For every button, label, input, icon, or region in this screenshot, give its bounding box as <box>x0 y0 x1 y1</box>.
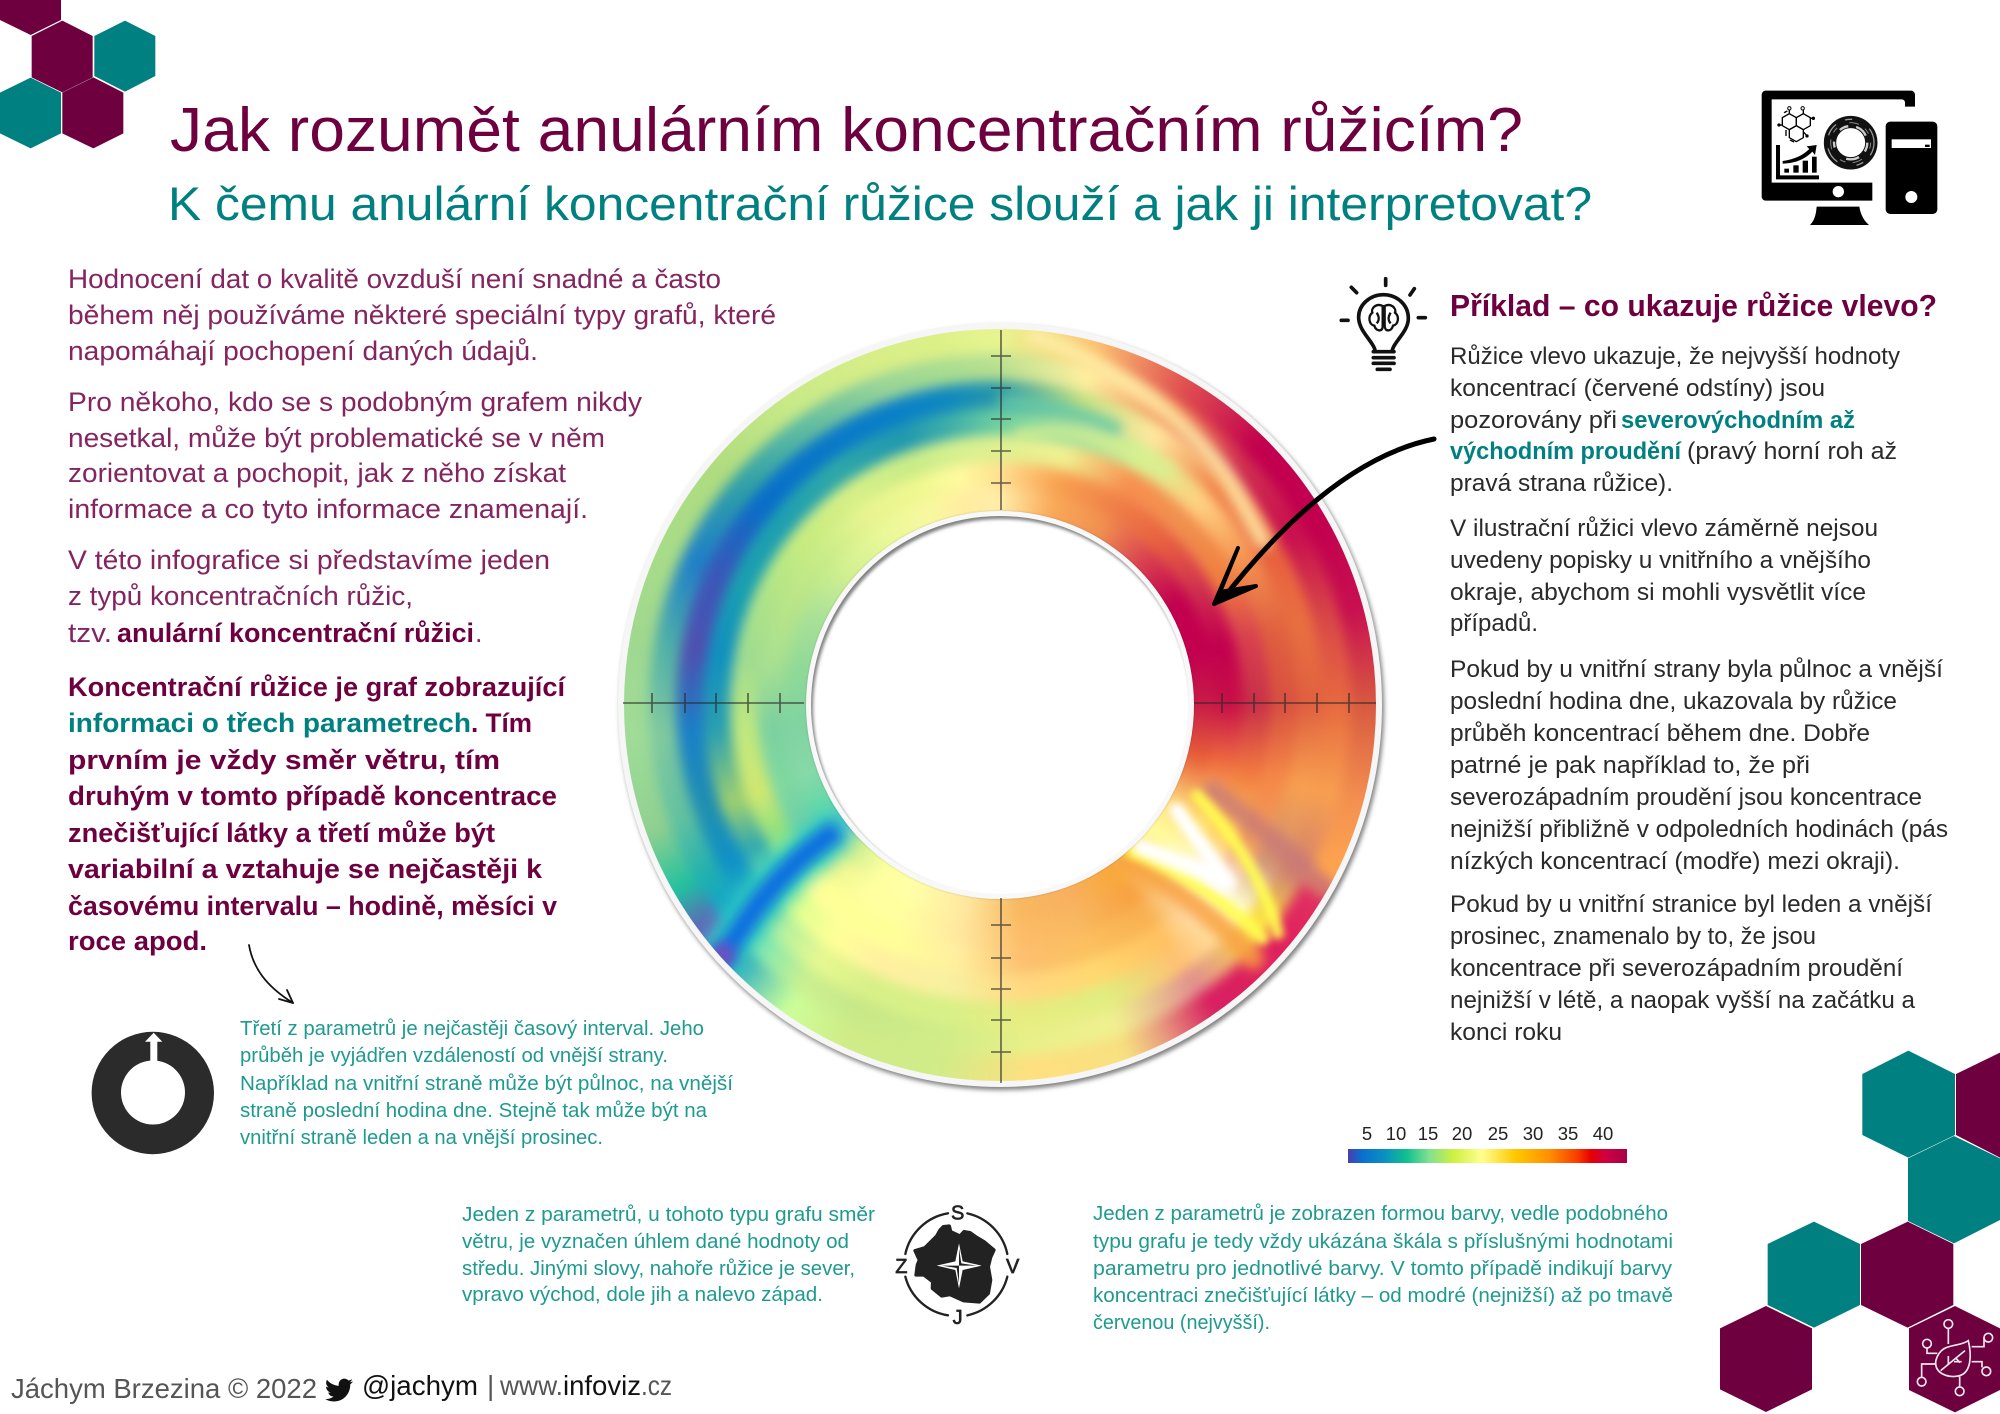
intro text: V této infografice si představíme jeden <box>68 545 550 575</box>
definition text: variabilní a vztahuje se nejčastěji k <box>68 854 543 884</box>
caption: colour parameter: červenou (nejvyšší). <box>1093 1312 1270 1334</box>
hexagons top left <box>0 0 155 148</box>
caption: third parameter: vnitřní straně leden a na vnější prosinec. <box>240 1127 603 1149</box>
example text: severovýchodním až <box>1621 407 1855 434</box>
legend: colour scale: 5 <box>1362 1123 1372 1144</box>
legend: colour scale: 40 <box>1593 1123 1613 1144</box>
intro text: zorientovat a pochopit, jak z něho získat <box>68 458 567 488</box>
example text: Růžice vlevo ukazuje, že nejvyšší hodnoty <box>1450 343 1901 370</box>
caption: third parameter: průběh je vyjádřen vzdáleností od vnější strany. <box>240 1045 668 1067</box>
footer: author and links: .cz <box>641 1370 672 1401</box>
legend: colour scale: 10 <box>1386 1123 1406 1144</box>
example text: pozorovány při <box>1450 407 1617 434</box>
footer: author and links <box>11 1370 672 1404</box>
example text: průběh koncentrací během dne. Dobře <box>1450 720 1870 747</box>
definition text: Koncentrační růžice je graf zobrazující <box>68 672 567 702</box>
icon: leaf circuit <box>1917 1320 1993 1396</box>
footer: author and links: infoviz <box>563 1370 641 1401</box>
footer: author and links: | <box>487 1370 494 1401</box>
example text: Pokud by u vnitřní strany byla půlnoc a vnější <box>1450 656 1943 683</box>
intro text: Hodnocení dat o kvalitě ovzduší není snadné a často <box>68 264 721 294</box>
legend: colour scale: 25 <box>1488 1123 1508 1144</box>
caption: colour parameter: Jeden z parametrů je zobrazen formou barvy, vedle podobného <box>1093 1203 1668 1225</box>
intro text: během něj používáme některé speciální typy grafů, které <box>68 300 776 330</box>
icon: compass with Czech map: S <box>951 1202 964 1224</box>
chart: annular concentration rose <box>616 322 1388 1094</box>
intro text: informace a co tyto informace znamenají. <box>68 494 588 524</box>
legend: colour scale <box>1348 1123 1627 1163</box>
example text: koncentrace při severozápadním proudění <box>1450 955 1903 982</box>
title: Jak rozumět anulárním koncentračním růžicím? <box>170 96 1523 165</box>
arrow: to time interval note <box>249 945 293 1003</box>
heading: example: Příklad – co ukazuje růžice vlevo? <box>1450 288 1937 323</box>
legend: colour scale: 35 <box>1558 1123 1578 1144</box>
example text: severozápadním proudění jsou koncentrace <box>1450 784 1922 811</box>
example text: nejnižší přibližně v odpoledních hodinách (pás <box>1450 816 1948 843</box>
definition text: roce apod. <box>68 926 207 956</box>
caption: third parameter: Třetí z parametrů je nejčastěji časový interval. Jeho <box>240 1018 704 1040</box>
example text: pravá strana růžice). <box>1450 470 1673 497</box>
example text: konci roku <box>1450 1019 1562 1046</box>
legend: colour scale: 15 <box>1418 1123 1438 1144</box>
caption: third parameter: straně poslední hodina dne. Stejně tak může být na <box>240 1100 708 1122</box>
intro text: nesetkal, může být problematické se v něm <box>68 423 605 453</box>
caption: colour parameter: koncentraci znečišťující látky – od modré (nejnižší) až po tmavě <box>1093 1285 1673 1307</box>
caption: colour parameter: typu grafu je tedy vždy ukázána škála s příslušnými hodnotami <box>1093 1231 1673 1253</box>
example text: (pravý horní roh až <box>1687 438 1897 465</box>
intro text: . <box>475 618 483 648</box>
caption: wind direction parameter: středu. Jinými slovy, nahoře růžice je sever, <box>462 1258 855 1280</box>
example text: východním proudění <box>1450 438 1682 465</box>
intro text <box>68 264 776 648</box>
caption: wind direction parameter: větru, je vyznačen úhlem dané hodnoty od <box>462 1231 849 1253</box>
subtitle: K čemu anulární koncentrační růžice slouží a jak ji interpretovat? <box>168 177 1592 230</box>
definition text: druhým v tomto případě koncentrace <box>68 781 557 811</box>
icon: compass with Czech map: Z <box>895 1256 907 1278</box>
icon: light bulb with brain <box>1341 279 1425 369</box>
example text: případů. <box>1450 610 1538 637</box>
definition text: informaci o třech parametrech <box>68 708 471 738</box>
example text: okraje, abychom si mohli vysvětlit více <box>1450 579 1866 606</box>
example text: poslední hodina dne, ukazovala by růžice <box>1450 688 1897 715</box>
caption: third parameter: Například na vnitřní straně může být půlnoc, na vnější <box>240 1073 733 1095</box>
intro text: Pro někoho, kdo se s podobným grafem nikdy <box>68 387 643 417</box>
icon: compass with Czech map: J <box>953 1307 963 1329</box>
example text: Pokud by u vnitřní stranice byl leden a vnější <box>1450 891 1932 918</box>
example text: prosinec, znamenalo by to, že jsou <box>1450 923 1816 950</box>
example text: koncentrací (červené odstíny) jsou <box>1450 375 1825 402</box>
footer: author and links: Jáchym Brzezina © 2022 <box>11 1373 317 1404</box>
axes with ticks on the rose <box>623 330 1376 1083</box>
example text: nejnižší v létě, a naopak vyšší na začátku a <box>1450 987 1915 1014</box>
caption: third parameter <box>240 1018 733 1149</box>
caption: colour parameter: parametru pro jednotlivé barvy. V tomto případě indikují barvy <box>1093 1258 1672 1280</box>
caption: colour parameter <box>1093 1203 1673 1334</box>
caption: wind direction parameter <box>462 1204 875 1306</box>
legend: colour scale: 30 <box>1523 1123 1543 1144</box>
definition text: znečišťující látky a třetí může být <box>68 818 495 848</box>
icon: compass with Czech map <box>895 1202 1020 1329</box>
example text: patrné je pak například to, že při <box>1450 752 1810 779</box>
icon: computer with rose and charts <box>1762 91 1937 225</box>
footer: author and links: @jachym <box>362 1370 478 1401</box>
caption: wind direction parameter: vpravo východ, dole jih a nalevo západ. <box>462 1284 823 1306</box>
example text: uvedeny popisky u vnitřního a vnějšího <box>1450 547 1871 574</box>
icon: compass with Czech map: V <box>1006 1256 1020 1278</box>
definition text: prvním je vždy směr větru, tím <box>68 745 500 775</box>
hexagons bottom right <box>1720 1051 2000 1412</box>
definition text: . Tím <box>471 708 532 738</box>
example text: V ilustrační růžici vlevo záměrně nejsou <box>1450 515 1878 542</box>
example text <box>1450 343 1948 1046</box>
intro text: anulární koncentrační růžici <box>117 618 474 648</box>
arrow: to high concentration area <box>1214 439 1434 604</box>
example text: nízkých koncentrací (modře) mezi okraji). <box>1450 848 1900 875</box>
intro text: tzv. <box>68 618 112 648</box>
definition text: časovému intervalu – hodině, měsíci v <box>68 891 557 921</box>
intro text: z typů koncentračních růžic, <box>68 581 413 611</box>
definition text <box>68 672 567 956</box>
footer: author and links: www. <box>499 1370 563 1401</box>
icon: ring with radial arrow <box>92 1032 214 1154</box>
legend: colour scale: 20 <box>1452 1123 1472 1144</box>
caption: wind direction parameter: Jeden z parametrů, u tohoto typu grafu směr <box>462 1204 875 1226</box>
intro text: napomáhají pochopení daných údajů. <box>68 336 538 366</box>
